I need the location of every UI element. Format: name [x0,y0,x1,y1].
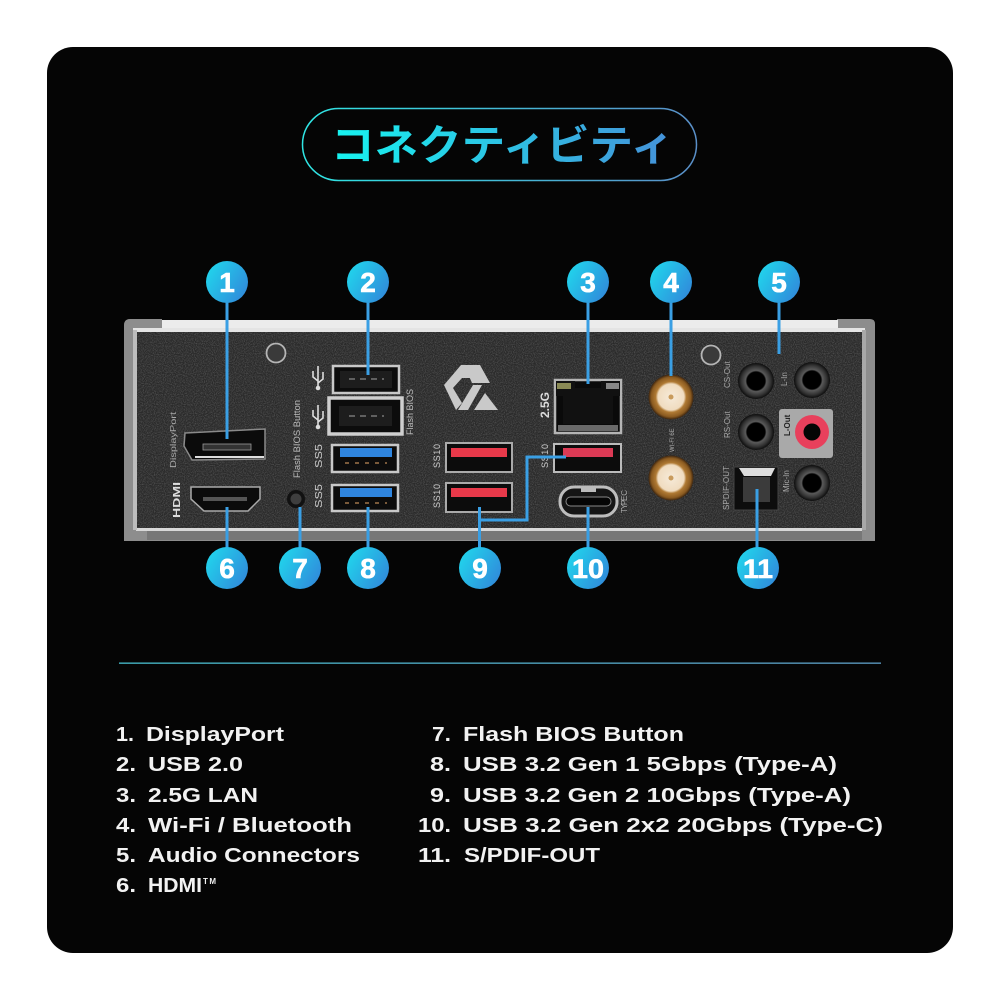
Wi-Fi antenna connectors: WI-FI 6E [670,428,676,452]
title text: コネクティビティ [331,122,674,169]
badge 4: 4 [663,267,679,298]
badge 2 [347,261,389,303]
legend left column: 4. [116,815,136,837]
legend right column: USB 3.2 Gen 2x2 20Gbps (Type-C) [463,815,883,837]
badge 3: 3 [580,267,596,298]
legend left column: TM [203,877,216,886]
badge 4 [650,261,692,303]
audio connectors: Mic-In [782,470,791,492]
badge 1 [206,261,248,303]
audio connectors: L-In [780,372,789,386]
badge 9: 9 [472,553,488,584]
USB 5Gbps blue ports: SS5 [314,483,325,508]
badge 7 [279,547,321,589]
legend left column: 1. [116,724,134,746]
badge 8: 8 [360,553,376,584]
LAN port [538,380,621,433]
legend left column: USB 2.0 [148,754,243,776]
badge 11 [737,547,779,589]
leader lines [227,300,779,550]
badge 7: 7 [292,553,308,584]
legend right column: USB 3.2 Gen 2 10Gbps (Type-A) [463,785,851,807]
USB 2.0 ports [313,366,415,435]
legend right column: S/PDIF-OUT [464,845,600,867]
audio connectors: CS-Out [723,361,732,388]
legend left column: 2.5G LAN [148,785,258,807]
screws [266,344,720,364]
USB 5Gbps blue ports [314,443,398,511]
badge 10 [567,547,609,589]
S/PDIF optical port [722,466,778,510]
legend left column: 5. [116,845,136,867]
legend right column: 11. [418,845,451,867]
legend right column: 7. [432,724,451,746]
badge 8 [347,547,389,589]
USB 10Gbps red ports: SS10 [540,444,550,468]
legend left column: HDMI [148,875,202,897]
divider [119,662,881,664]
USB 10Gbps red ports: SS10 [432,444,442,468]
flash BIOS button [287,400,305,508]
flash BIOS button: Flash BIOS Button [292,400,302,478]
badge 5: 5 [771,267,787,298]
legend left column: 2. [116,754,136,776]
badge 2: 2 [360,267,376,298]
legend left column: DisplayPort [146,724,284,746]
audio connectors: RS-Out [723,411,732,438]
legend left column: 6. [116,875,136,897]
badge 11: 11 [743,554,773,584]
I/O shield plate [124,319,875,541]
USB 5Gbps blue ports: SS5 [314,443,325,468]
USB 10Gbps red ports: SS10 [432,484,442,508]
icon: USB symbols [313,366,323,428]
legend right column: 9. [430,785,451,807]
logo [444,365,498,410]
Wi-Fi antenna connectors [648,374,694,500]
USB Type-C port: TYPE C [620,490,629,513]
legend left column: Wi-Fi / Bluetooth [148,815,352,837]
LAN port: 2.5G [538,392,552,418]
USB 10Gbps red ports [432,443,621,512]
S/PDIF optical port: SPDIF-OUT [722,466,731,510]
title pill [302,108,696,180]
legend right column [418,724,883,867]
badge 6: 6 [219,553,235,584]
legend right column: 8. [430,754,451,776]
legend right column: Flash BIOS Button [463,724,684,746]
badge 9 [459,547,501,589]
legend left column: 3. [116,785,136,807]
DisplayPort port [169,411,265,468]
audio connectors: L-Out [783,414,792,436]
legend right column: USB 3.2 Gen 1 5Gbps (Type-A) [463,754,837,776]
DisplayPort port: DisplayPort [169,411,178,468]
number badges [206,261,800,589]
badge 6 [206,547,248,589]
badge 10: 10 [572,554,604,584]
badge 1: 1 [219,267,235,298]
legend left column: Audio Connectors [148,845,360,867]
USB 2.0 ports: Flash BIOS [405,389,415,435]
HDMI port: HDMI [172,482,183,518]
HDMI port [172,482,260,518]
audio connectors [723,361,833,501]
badge 5 [758,261,800,303]
legend left column [116,724,360,897]
USB Type-C port [560,486,629,516]
legend right column: 10. [418,815,451,837]
badge 3 [567,261,609,303]
